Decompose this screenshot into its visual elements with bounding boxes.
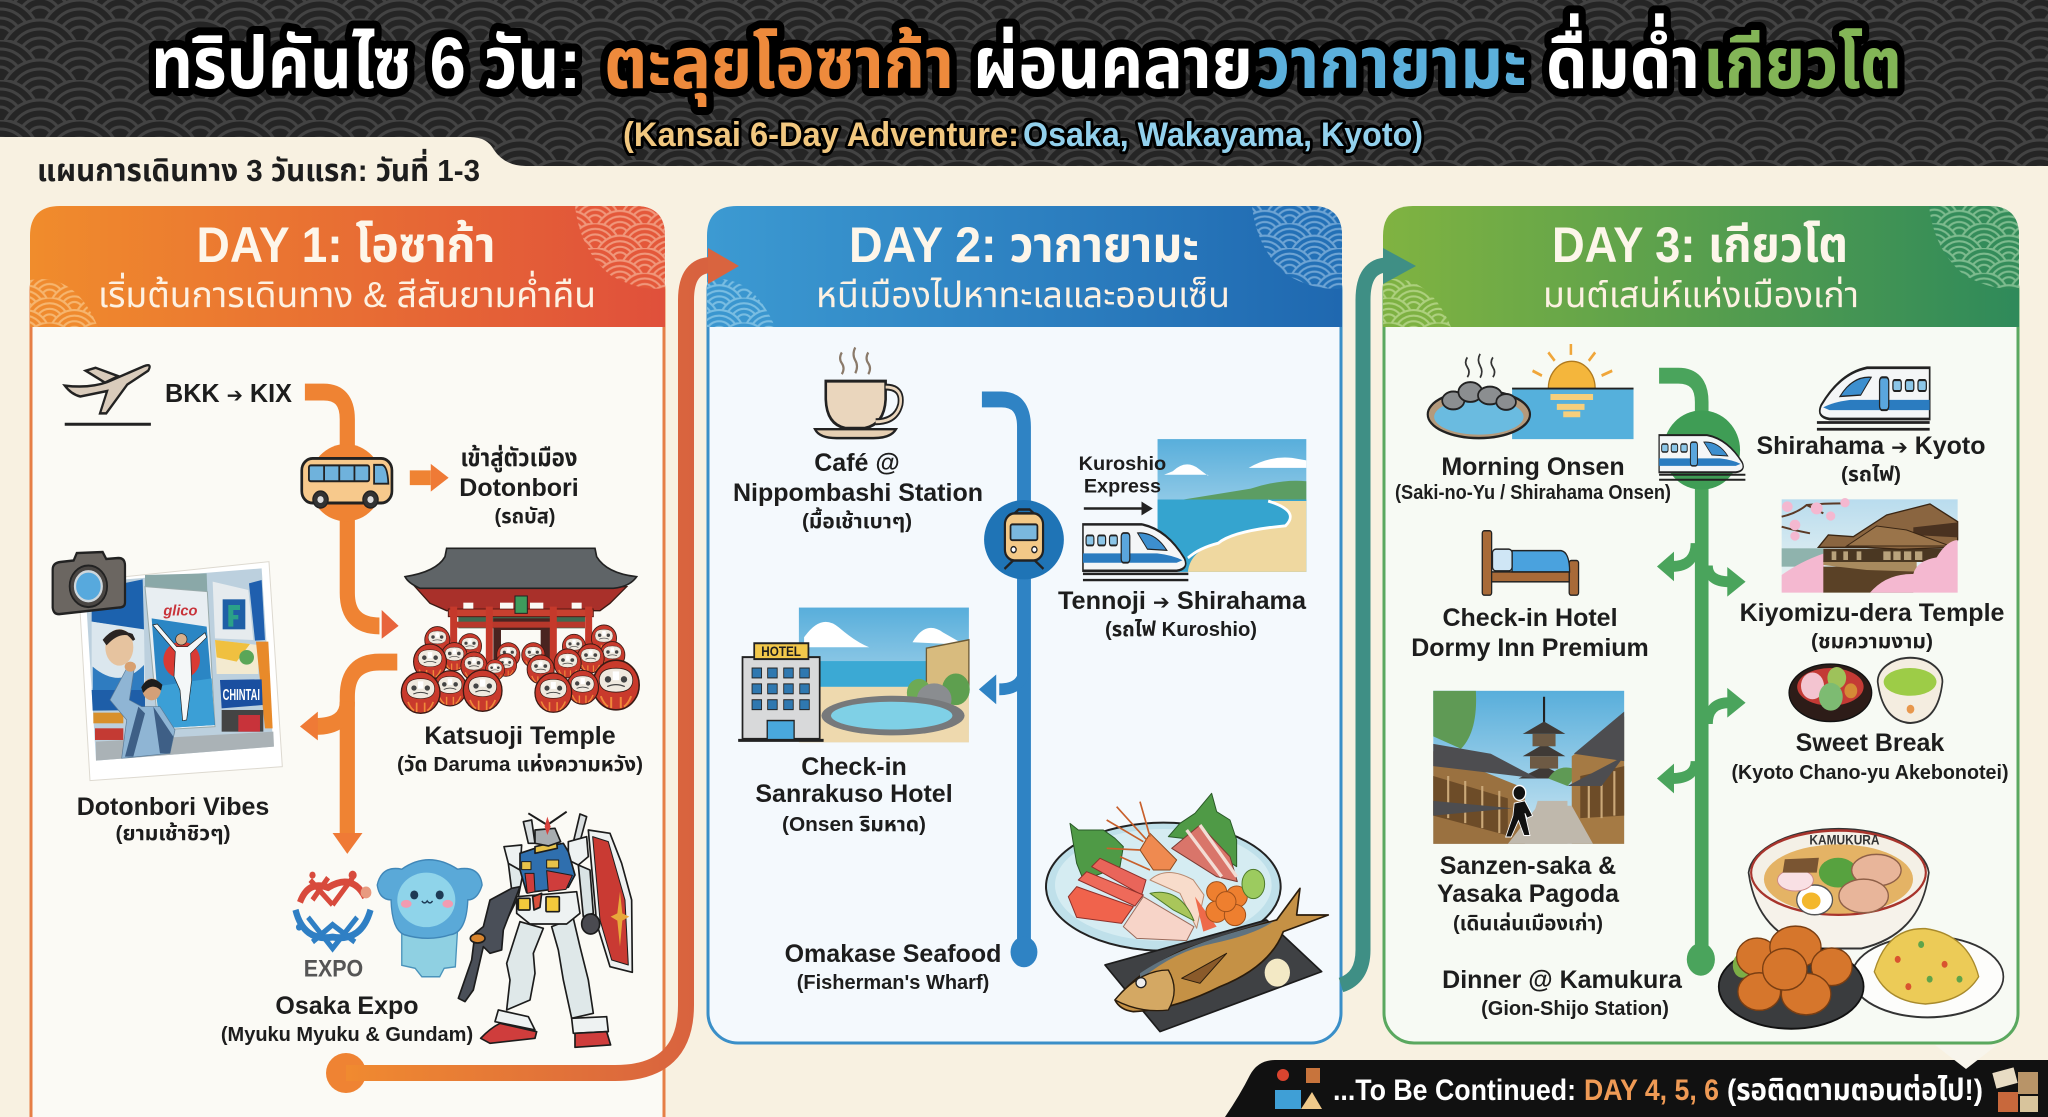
- day 2 header: DAY 2: วากายามะ: [849, 217, 1199, 273]
- illustration: sashimi and grilled fish: [1046, 793, 1328, 1032]
- footer text: [1333, 1074, 1983, 1107]
- photo: Dotonbori polaroid with camera: glico: [162, 603, 198, 619]
- day 1 header: [30, 206, 665, 327]
- label: Tennoji to Shirahama: (รถไฟ Kuroshio): [1105, 619, 1257, 641]
- label: into Dotonbori: [459, 444, 579, 528]
- label: Tennoji to Shirahama: [1058, 587, 1307, 641]
- label: Morning Onsen: Morning Onsen: [1441, 453, 1625, 481]
- orange route line: [305, 392, 431, 836]
- illustration: ramen bowl: KAMUKURA: [1809, 832, 1880, 848]
- icon: temple with daruma: [401, 548, 639, 713]
- label: Sweet Break: (Kyoto Chano-yu Akebonotei): [1732, 762, 2008, 784]
- title: ตะลุยโอซาก้า: [604, 24, 954, 107]
- icon: shinkansen in circle: [1659, 410, 1745, 490]
- illustration: Kiyomizu temple: [1782, 498, 1958, 593]
- subtitle: Osaka, Wakayama, Kyoto): [1023, 116, 1423, 154]
- label: Dinner: [1442, 966, 1683, 1020]
- label: Dotonbori Vibes: (ยามเช้าชิวๆ): [116, 823, 230, 845]
- illustration: Kuroshio beach: [1083, 439, 1306, 580]
- label: Sanzen-saka: [1437, 852, 1620, 935]
- label: Omakase: (Fisherman's Wharf): [797, 972, 989, 994]
- illustration: morning onsen: [1428, 344, 1634, 439]
- label: Katsuoji Temple: Katsuoji Temple: [424, 722, 616, 750]
- label: Omakase: Omakase Seafood: [785, 940, 1001, 968]
- label: Katsuoji Temple: (วัด Daruma แห่งความหวัง): [397, 754, 643, 776]
- label: Sanzen-saka: Yasaka Pagoda: [1437, 880, 1620, 908]
- label: Shirahama to Kyoto: Shirahama ➔ Kyoto: [1756, 432, 1986, 460]
- footer text: ...To Be Continued:: [1333, 1074, 1576, 1107]
- arrow: day 2 to day 3: [1341, 248, 1416, 985]
- icon: bed: [1482, 531, 1579, 595]
- day 1 header: DAY 1: โอซาก้า: [196, 217, 496, 273]
- illustration: karaage: [1719, 926, 1864, 1029]
- label: Osaka Expo: Osaka Expo: [275, 992, 419, 1020]
- icon: Gundam: [458, 812, 632, 1047]
- icon: coffee cup: [815, 347, 901, 438]
- footer text: DAY 4, 5, 6: [1584, 1074, 1719, 1107]
- icon: sweets bowl: [1789, 664, 1872, 722]
- icon: bus: [302, 444, 392, 521]
- label: Sanrakuso: [755, 753, 953, 836]
- label: Shirahama to Kyoto: (รถไฟ): [1841, 464, 1901, 486]
- grilled fish: [1105, 888, 1328, 1032]
- label: Sanzen-saka: Sanzen-saka &: [1440, 852, 1616, 880]
- icon: shinkansen: [1817, 368, 1930, 429]
- label: Shirahama to Kyoto: [1756, 432, 1986, 486]
- illustration: hotel and onsen: HOTEL: [761, 644, 801, 659]
- label: Sanrakuso: Check-in: [801, 753, 907, 781]
- header band: [0, 0, 2048, 166]
- label: Sanzen-saka: (เดินเล่นเมืองเก่า): [1453, 913, 1603, 935]
- label: Dormy Inn: Dormy Inn Premium: [1411, 634, 1649, 662]
- icon: Myuku mascot: [377, 860, 482, 977]
- label: Kiyomizu-dera: Kiyomizu-dera Temple: [1740, 599, 2005, 627]
- day 1 header: เริ่มต้นการเดินทาง & สีสันยามค่ำคืน: [98, 270, 596, 315]
- label: Omakase: [785, 940, 1001, 994]
- icon: stamps: [1992, 1067, 2038, 1112]
- blue route line: [982, 399, 1024, 952]
- icon: map: [1275, 1068, 1322, 1109]
- icon: plane: [65, 365, 151, 424]
- label: Kuroshio Express: Kuroshio: [1079, 452, 1166, 474]
- title: ทริปคันไซ 6 วัน:: [151, 24, 581, 104]
- label: Dormy Inn: Check-in Hotel: [1442, 604, 1618, 632]
- icon: Expo logo: EXPO: [304, 956, 363, 982]
- illustration: ramen bowl: [1749, 829, 1929, 948]
- illustration: Sanzen-saka: [1433, 691, 1624, 844]
- panel: day 1: [30, 206, 665, 1117]
- subtitle: (Kansai 6-Day Adventure:: [623, 116, 1019, 154]
- label: into Dotonbori: Dotonbori: [459, 474, 579, 502]
- green route line: [1659, 376, 1729, 959]
- label: Cafe: [733, 449, 983, 533]
- label: Cafe: (มื้อเช้าเบาๆ): [802, 507, 912, 533]
- label: Dotonbori Vibes: Dotonbori Vibes: [77, 793, 269, 821]
- day 2 header: หนีเมืองไปหาทะเลและออนเซ็น: [816, 274, 1230, 315]
- icon: camera: [53, 552, 125, 614]
- day 2 header: [707, 206, 1342, 327]
- day 3 header: [1383, 206, 2019, 327]
- label: Osaka Expo: (Myuku Myuku & Gundam): [221, 1024, 473, 1046]
- label: BKK to KIX: BKK ➔ KIX: [165, 378, 293, 408]
- label: Tennoji to Shirahama: Tennoji ➔ Shirahama: [1058, 587, 1307, 615]
- label: Sanrakuso: Sanrakuso Hotel: [755, 780, 953, 808]
- label: Sanrakuso: (Onsen ริมหาด): [782, 814, 926, 836]
- subtitle: [623, 116, 1423, 154]
- title: [151, 13, 1902, 107]
- title: ดื่มด่ำ: [1546, 13, 1700, 104]
- label: Dotonbori Vibes: [77, 793, 269, 845]
- photo: Dotonbori polaroid with camera: [53, 552, 282, 781]
- label: Kuroshio Express: Express: [1084, 475, 1161, 497]
- label: Katsuoji Temple: [397, 722, 643, 776]
- label: Osaka Expo: [221, 992, 473, 1046]
- arrow: day 1 to day 2: [326, 248, 739, 1093]
- sashimi plate: [1046, 793, 1281, 951]
- title: เกียวโต: [1703, 24, 1902, 104]
- day 3 header: DAY 3: เกียวโต: [1552, 217, 1848, 273]
- arrowheads: [300, 464, 449, 854]
- panel: day 3: [1383, 206, 2019, 1043]
- label: Morning Onsen: (Saki-no-Yu / Shirahama Onsen): [1395, 482, 1671, 504]
- day 3 header: มนต์เสน่ห์แห่งเมืองเก่า: [1543, 274, 1859, 315]
- illustration: fried rice: [1852, 929, 2003, 1017]
- label: Kiyomizu-dera: (ชมความงาม): [1811, 631, 1933, 653]
- footer banner: [1225, 1045, 2048, 1117]
- label: Dormy Inn: [1411, 604, 1649, 662]
- illustration: hotel and onsen: [738, 608, 970, 742]
- panel: day 2: [707, 206, 1342, 1043]
- green branch arrowheads: [1657, 552, 1746, 793]
- label: into Dotonbori: (รถบัส): [495, 506, 555, 528]
- label: Dinner: Dinner @ Kamukura: [1442, 966, 1683, 994]
- footer text: (รอติดตามตอนต่อไป!): [1727, 1074, 1983, 1107]
- label: Morning Onsen: [1395, 453, 1671, 504]
- section heading: แผนการเดินทาง 3 วันแรก: วันที่ 1-3: [37, 148, 480, 188]
- label: Kiyomizu-dera: [1740, 599, 2005, 653]
- icon: train in circle: [984, 500, 1064, 579]
- photo: Dotonbori polaroid with camera: CHINTAI: [223, 687, 260, 704]
- icon: matcha bowl: [1878, 658, 1942, 723]
- label: Dinner: (Gion-Shijo Station): [1481, 998, 1669, 1020]
- label: Cafe: Nippombashi Station: [733, 479, 983, 507]
- title: วากายามะ: [1256, 24, 1527, 104]
- icon: Expo logo: [296, 871, 371, 982]
- label: Sweet Break: [1732, 729, 2008, 784]
- label: Kuroshio Express: [1079, 452, 1166, 515]
- label: into Dotonbori: เข้าสู่ตัวเมือง: [460, 444, 578, 473]
- label: Cafe: Café @: [814, 449, 900, 477]
- title: ผ่อนคลาย: [973, 24, 1253, 104]
- label: Sweet Break: Sweet Break: [1796, 729, 1944, 757]
